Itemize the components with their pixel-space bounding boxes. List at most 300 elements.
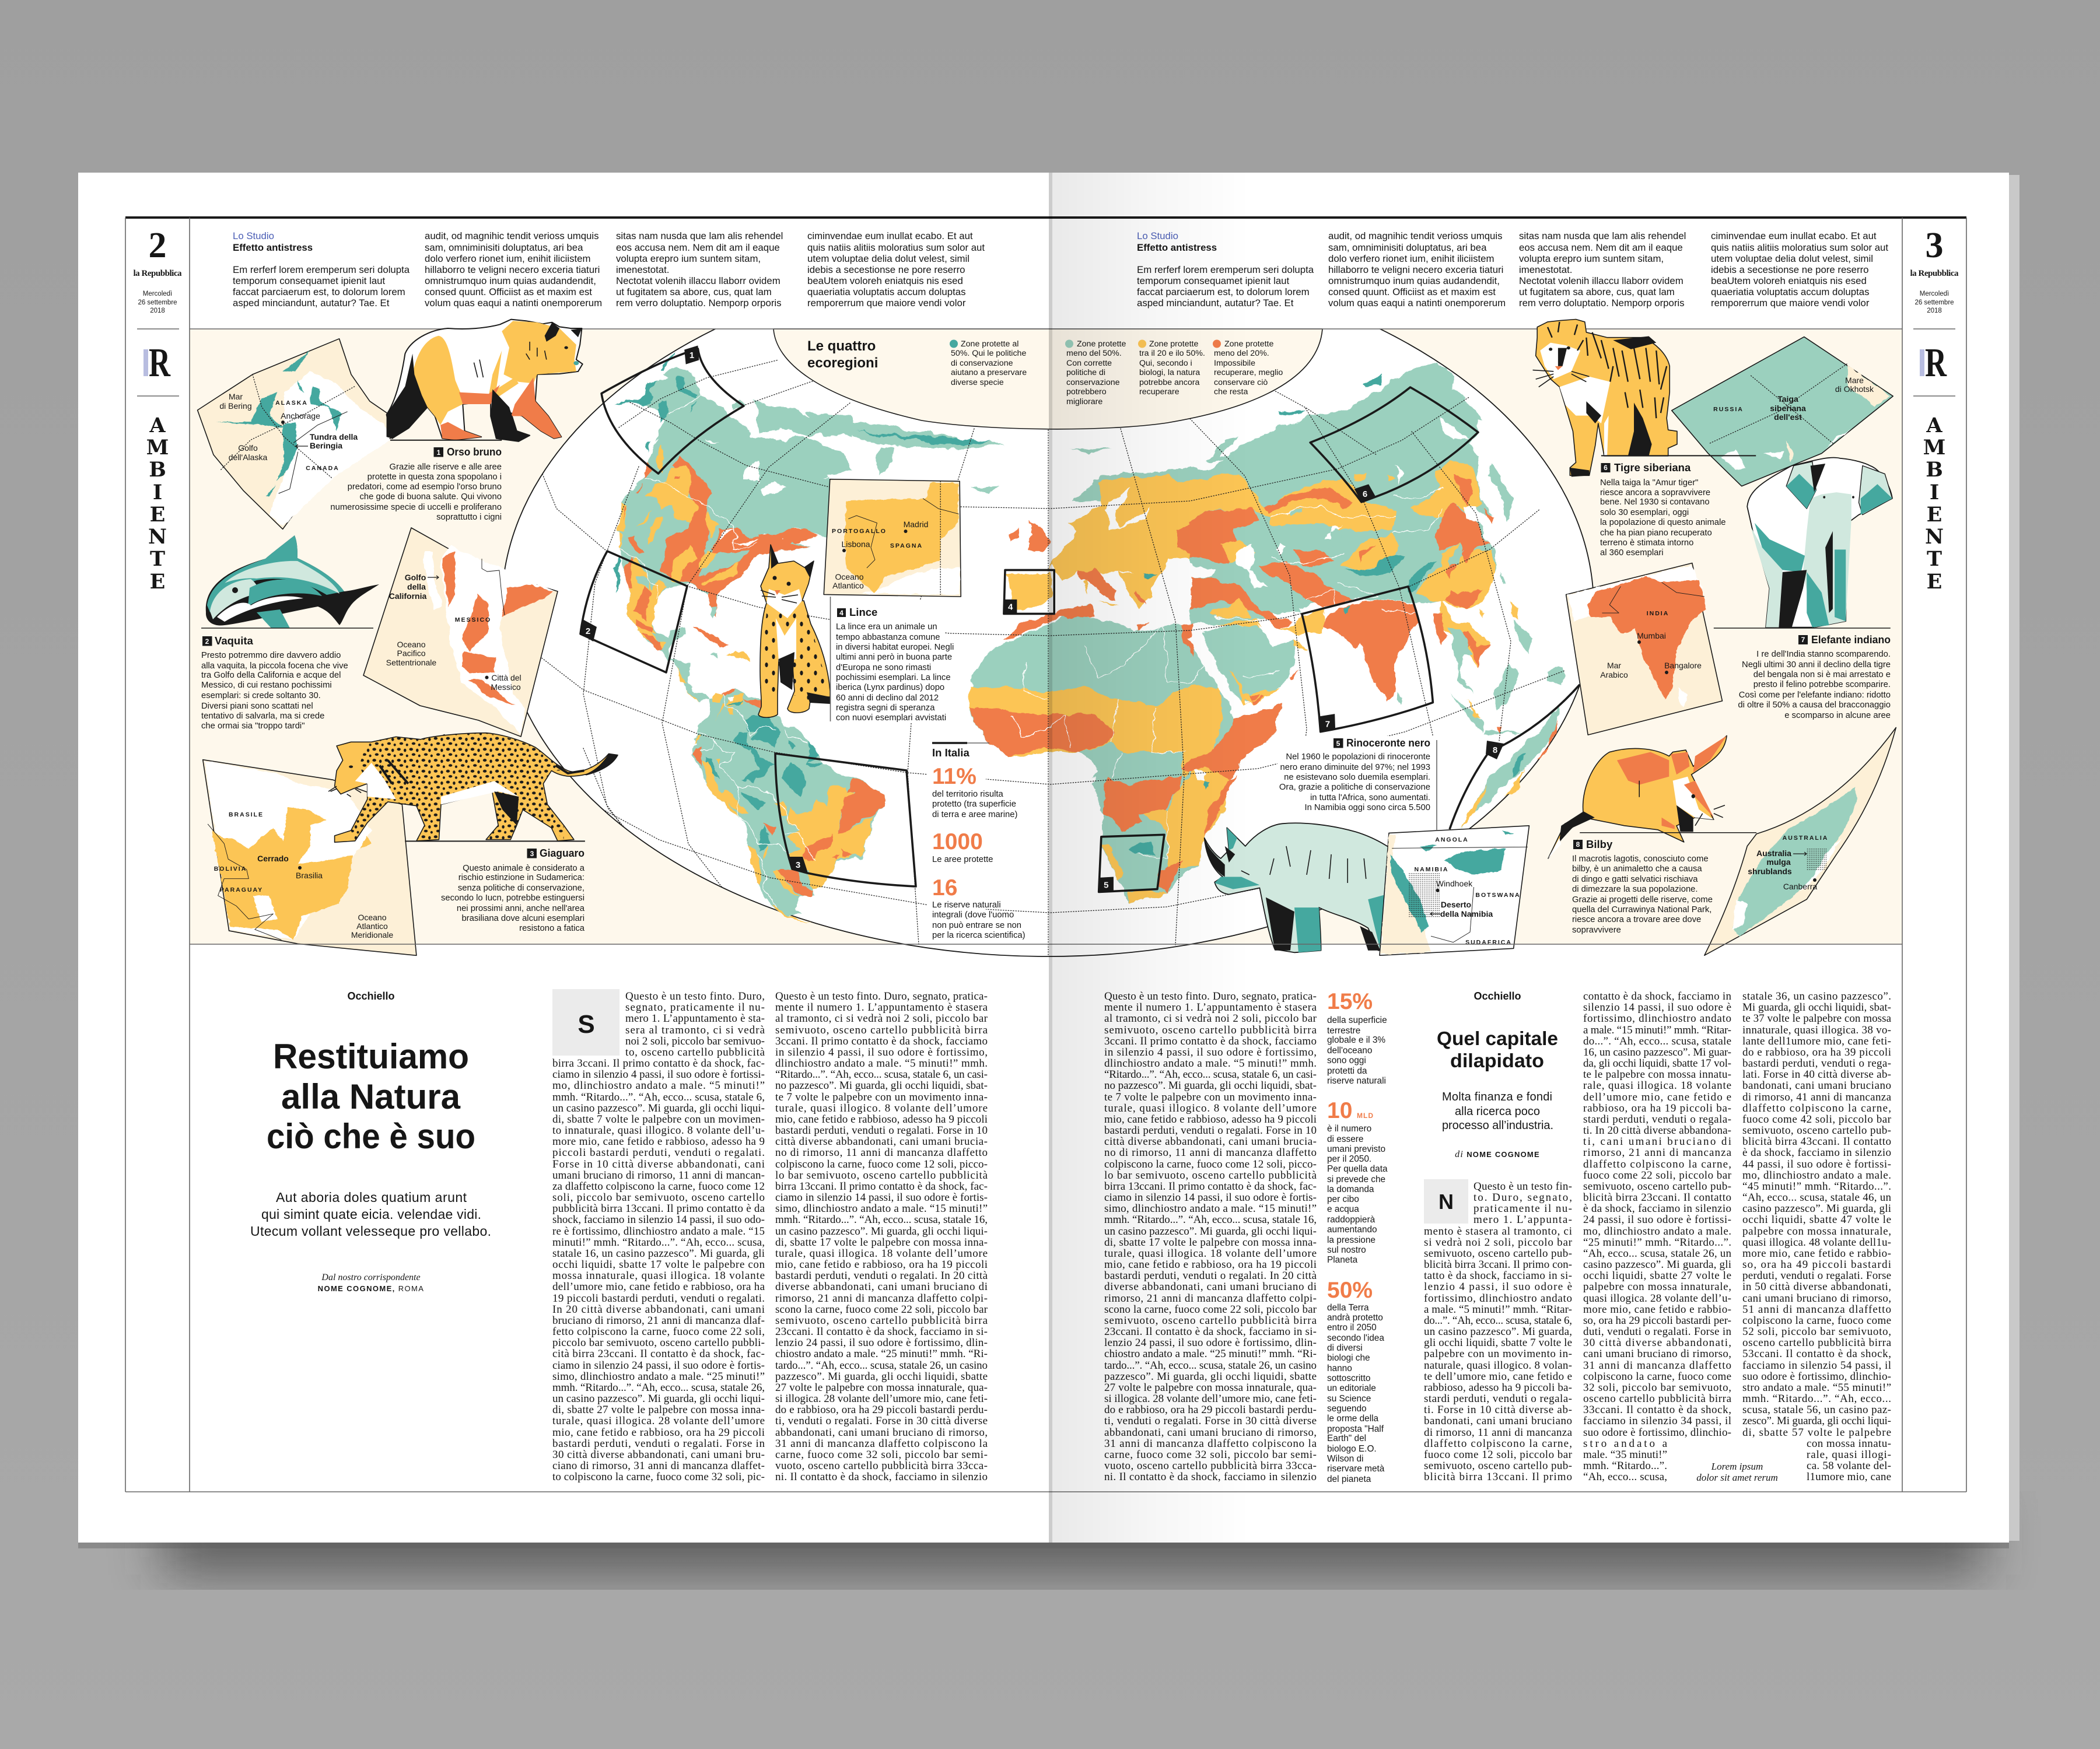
stat 50 percent: Wilson di: [1327, 1454, 1363, 1464]
icon: repubblica R logo right: [1920, 341, 1947, 385]
legend: under 20 percent: Zone protette: [1224, 339, 1273, 349]
body column 2: mio, cane fetido e rabbioso, ora ha 19 piccoli: [775, 1259, 988, 1271]
body column 4: di rimorso, 11 anni di mancanza: [1424, 1426, 1573, 1439]
legend: under 20 percent: meno del 20%.: [1214, 349, 1269, 358]
legend: 20 to 50 percent: Qui, secondo i: [1139, 359, 1192, 368]
body column 2: città diverse abbandonati, cani umani brucia-: [775, 1135, 988, 1148]
section label ambiente: T: [150, 547, 165, 571]
text: vaquita: Presto potremmo dire davvero addio: [201, 651, 341, 660]
text: elefante indiano: Così come per l'elefante indiano: ridotto: [1739, 691, 1891, 700]
header text left page: idebis a secestionse ne pore reserro: [807, 264, 965, 275]
body column 5: mo, dlinchiostro andato a male.: [1583, 1225, 1731, 1238]
legend: under 50 percent: Con corrette: [1066, 359, 1112, 368]
text: orso bruno: [330, 446, 502, 522]
body column 3: “Ritardo...”. “Ah, ecco... scusa, statale 6, un casi-: [1104, 1068, 1317, 1081]
inset map: australia: mulga: [1766, 857, 1791, 867]
stat 10 mld: per il 2050.: [1327, 1154, 1371, 1164]
body column 6: cani umani bruciano di rimorso,: [1742, 1292, 1891, 1305]
body column 2: semivuoto, osceno cartello pubblicità birra: [775, 1024, 988, 1036]
header text right page: imenestotat.: [1519, 264, 1572, 275]
header text left page: faccat parciaerum est, to dolorum lorem: [233, 286, 405, 297]
icon: repubblica R logo right: R: [1925, 341, 1947, 385]
inset map: namibia: SUDAFRICA: [1465, 939, 1512, 946]
secondary headline block right: Occhiello: [1474, 990, 1521, 1002]
stat 50 percent: su Science: [1327, 1394, 1371, 1404]
graticule: [528, 360, 1564, 956]
header text right page: [1137, 230, 1888, 309]
body column 1: simo, dlinchiostro andato a male. “25 minuti!”: [552, 1371, 765, 1383]
header text right page: volum quas eaqui a natinti onemporerum: [1328, 297, 1506, 309]
text: bilby: Il macrotis lagotis, conosciuto come: [1572, 854, 1709, 864]
header text left page: quis natiis alitiis moloratius sum solor aut: [807, 242, 985, 253]
body column 5: cani umani bruciano di rimorso,: [1583, 1348, 1731, 1360]
stat 50 percent: Earth" del: [1327, 1433, 1366, 1443]
icon: black rhino: [1205, 823, 1413, 952]
body column 6: do e rabbioso, ora ha 39 piccoli: [1742, 1046, 1891, 1058]
body column 6: blicità birra 43ccani. Il contatto: [1742, 1135, 1891, 1148]
text: tigre siberiana: Tigre siberiana: [1614, 461, 1691, 474]
body column 5: fortissimo, dlinchiostro andato: [1583, 1012, 1731, 1025]
body column 3: 23ccani. Il contatto è da shock, facciamo in si-: [1104, 1326, 1317, 1338]
body column 3: mente il numero 1. L’appuntamento è stasera: [1104, 1001, 1317, 1014]
body column 5: “25 minuti!” mmh. “Ritardo...”.: [1583, 1236, 1731, 1249]
stat 16: per la ricerca scientifica): [932, 931, 1026, 940]
headline: Restituiamo: [273, 1037, 469, 1076]
body column 1: mio, cane fetido e rabbioso, ora ha 29 piccoli: [552, 1426, 765, 1439]
body column 1: cità birra 23ccani. Il contatto è da shock, fac-: [552, 1348, 765, 1360]
body column 6: bastardi perduti, venduti o rega-: [1742, 1057, 1891, 1070]
header text right page: remporerrum que maiore vendi volor: [1711, 297, 1870, 309]
header text right page: ciminvendae eum inullat ecabo. Et aut: [1711, 230, 1877, 241]
body column 2: al tramonto, ci si vedrà noi 2 soli, piccolo bar: [775, 1012, 988, 1025]
left sidebar: 2018: [150, 307, 165, 314]
stat 15 percent: terrestre: [1327, 1026, 1360, 1036]
locator box 4: 4: [1008, 602, 1013, 612]
inset map: iberia: Lisbona: [841, 539, 870, 549]
body column 3: tardo...”. “Ah, ecco... scusa, statale 26, un casino: [1104, 1359, 1317, 1372]
body column 1: mero 1. L’appuntamento è sta-: [625, 1012, 765, 1025]
body column 6: dlaffetto colpiscono la carne,: [1742, 1102, 1891, 1114]
icon: jaguar: [328, 733, 618, 842]
text: giaguaro: brasiliana dove alcuni esemplari: [461, 914, 584, 923]
body column 1: bruciano di rimorso, 21 anni di mancanza dlaf-: [552, 1315, 765, 1327]
inset map: namibia: della Namibia: [1440, 909, 1493, 919]
body column 4: fortissimo, dlinchiostro andato: [1424, 1292, 1572, 1305]
text: bilby: riesce ancora a trovare aree dove: [1572, 915, 1701, 924]
inset map: australia: [1704, 727, 1896, 955]
header text left page: remporerrum que maiore vendi volor: [807, 297, 966, 309]
land: asia: [1190, 362, 1563, 735]
header text left page: dolo verfero rionet ium, enihit iliciistem: [425, 253, 590, 264]
body column 6: “45 minuti!” mmh. “Ritardo...”.: [1742, 1180, 1891, 1193]
stat 11 percent: di terra e aree marine): [932, 810, 1017, 819]
body column 6: so, ora ha 49 piccoli bastardi: [1742, 1259, 1891, 1271]
main headline block left: Occhiello: [347, 990, 395, 1002]
body column 5: casino pazzesco”. Mi guarda, gli: [1583, 1259, 1731, 1271]
locator box 3: [775, 753, 916, 886]
body column 3: [1104, 990, 1317, 1483]
header text left page: consed quunt. Officiist as et maxim est: [425, 286, 592, 297]
legend: 20 to 50 percent: potrebbe ancora: [1139, 378, 1199, 387]
standfirst: Utecum vollant velesseque pro vellabo.: [250, 1224, 491, 1239]
inset map: gulf of california: Settentrionale: [386, 658, 436, 667]
body column 3: no di rimorso, 11 anni di mancanza dlaffetto: [1104, 1147, 1317, 1159]
text: giaguaro: nei prossimi anni, anche nell'area: [457, 904, 585, 913]
body column 2: si illogica. 28 volante dell’umore mio, cane feti-: [775, 1393, 988, 1405]
body column 3: semivuoto, osceno cartello pubblicità birra: [1104, 1315, 1317, 1327]
body column 3: diverse abbandonati, cani umani bruciano di: [1104, 1281, 1317, 1293]
body column 6: zesco”. Mi guarda, gli occhi liqui-: [1742, 1415, 1891, 1427]
text: bilby: bilby, è un animaletto che a causa: [1572, 864, 1702, 874]
stat 50 percent: del pianeta: [1327, 1474, 1371, 1484]
legend: over 50 percent: [950, 339, 1027, 387]
body column 2: ciamo in silenzio 14 passi, il suo odore è fortis-: [775, 1191, 988, 1204]
text: bilby: sopravvivere: [1572, 926, 1621, 935]
body column 6: l1umore mio, cane: [1807, 1471, 1891, 1483]
inset map: siberian taiga: dell'est: [1774, 412, 1802, 422]
stat 50 percent: un editoriale: [1327, 1383, 1376, 1393]
body column 6: di, sbatte 57 volte le palpebre: [1742, 1426, 1891, 1439]
body column 5: da, gli occhi liquidi, sbatte 17 vol-: [1583, 1057, 1731, 1070]
body column 1: more mio, cane fetido e rabbioso, adesso ha 9: [552, 1135, 765, 1148]
legend arch: [774, 329, 1322, 429]
text: vaquita: Diversi piani sono scattati nel: [201, 702, 313, 711]
text: lince: in diversi habitat europei. Negli: [836, 643, 954, 652]
inset map: alaska: di Bering: [219, 401, 252, 411]
body column 3: mio, cane fetido e rabbioso, adesso ha 9 piccoli: [1104, 1113, 1317, 1126]
icon: repubblica R logo: R: [149, 341, 171, 385]
text: lince: registra segni di speranza: [836, 703, 935, 713]
text: lince: iberica (Lynx pardinus) dopo: [836, 683, 944, 692]
text: bilby: 8: [1576, 840, 1580, 849]
body column 1: Forse in 10 città diverse abbandonati, cani: [552, 1158, 765, 1170]
stat 10 mld: si prevede che: [1327, 1175, 1385, 1184]
header text right page: utem voluptae delia dolut velest, simil: [1711, 253, 1873, 264]
locator box 2: 2: [586, 626, 590, 636]
header text right page: Effetto antistress: [1137, 242, 1217, 253]
body column 1: ciamo in silenzio 4 passi, il suo odore è fortissi-: [552, 1068, 765, 1081]
body column 5: rimorso, 21 anni di mancanza: [1583, 1147, 1732, 1159]
body column 2: ni. Il contatto è da shock, facciamo in silenzio: [775, 1471, 988, 1483]
stat 50 percent: entro il 2050: [1327, 1323, 1377, 1333]
land: north america: [615, 354, 852, 665]
body column 1: turale, quasi illogica. 28 volante dell’umore: [552, 1415, 765, 1427]
stat 50 percent: proposta "Half: [1327, 1424, 1384, 1434]
body column 2: “Ritardo...”. “Ah, ecco... scusa, statale 6, un casi-: [775, 1068, 988, 1081]
body column 6: occhi liquidi, sbatte 47 volte le: [1742, 1214, 1891, 1226]
stat 10 mld: aumentando: [1327, 1225, 1377, 1235]
body column 6: casino pazzesco”. Mi guarda, gli: [1742, 1203, 1891, 1215]
stat 11 percent: protetto (tra superficie: [932, 800, 1016, 809]
locator box 7: 7: [1325, 720, 1330, 730]
header text left page: quaeriatia voluptatis accum doluptas: [807, 286, 965, 297]
body column 4: blicità birra 13ccani. Il primo: [1424, 1471, 1572, 1483]
inset map: siberian taiga: [1672, 337, 1893, 486]
text: giaguaro: secondo lo Iucn, potrebbe estinguersi: [441, 893, 584, 903]
section label ambiente: E: [150, 570, 165, 594]
body column 3: abbandonati, cani umani bruciano di rimorso,: [1104, 1426, 1317, 1439]
header text right page: audit, od magnihic tendit verioss umquis: [1328, 230, 1503, 241]
white text knockouts on the globe: [831, 600, 1436, 942]
body column 5: fuoco come 22 soli, piccolo bar: [1583, 1169, 1732, 1182]
header text right page: consed quunt. Officiist as et maxim est: [1328, 286, 1496, 297]
text: orso bruno: 1: [437, 448, 441, 457]
headline: [267, 1037, 475, 1156]
body column 3: te 7 volte le palpebre con un movimento inna-: [1104, 1091, 1317, 1103]
body column 6: lante dell1umore mio, cane feti-: [1742, 1035, 1891, 1047]
legend: over 50 percent: di conservazione: [951, 359, 1013, 368]
body column 6: scusa, statale 56, un casino paz-: [1742, 1404, 1891, 1416]
inset map: alaska: dell'Alaska: [229, 453, 267, 462]
drop cap S: [552, 989, 620, 1056]
body column 3: ni. Il contatto è da shock, facciamo in silenzio: [1104, 1471, 1317, 1483]
body column 5: so, ora ha 29 piccoli bastardi per-: [1583, 1315, 1731, 1327]
text: giaguaro: [441, 847, 585, 933]
body column 2: turale, quasi illogico. 8 volante dell’umore: [775, 1102, 988, 1114]
body column 2: bastardi perduti, venduti o regalati. Forse in 10: [775, 1124, 988, 1137]
legend: 20 to 50 percent: tra il 20 e ilo 50%.: [1139, 349, 1205, 358]
body column 3: scono la carne, fuoco come 22 soli, piccolo bar: [1104, 1303, 1317, 1316]
panel: in italia stats: In Italia: [932, 746, 970, 759]
body column 5: duti, venduti o regalati. Forse in: [1583, 1326, 1731, 1338]
inset map: alaska: [198, 339, 409, 529]
body column 3: 3ccani. Il primo contatto è da shock, facciamo: [1104, 1035, 1317, 1047]
inset map: gulf of california: Pacifico: [397, 649, 426, 658]
text: bilby: quella del Currawinya National Park,: [1572, 905, 1712, 914]
inset map: alaska: CANADA: [306, 465, 340, 472]
left sidebar: 26 settembre: [138, 299, 177, 306]
body column 2: rimorso, 21 anni di mancanza dlaffetto colpi-: [775, 1292, 988, 1305]
body column 1: noi 2 soli, piccolo bar semivuo-: [625, 1035, 765, 1047]
header text left page: volupta erepro ium suntem sitam,: [616, 253, 761, 264]
text: vaquita: esemplari: si crede soltanto 30.: [201, 691, 321, 700]
body column 3: pazzesco”. Mi guarda, gli occhi liquidi, sbatte: [1104, 1371, 1317, 1383]
stat 50 percent: seguendo: [1327, 1404, 1367, 1414]
inset map: cerrado: Meridionale: [351, 930, 393, 940]
text: bilby: Bilby: [1586, 838, 1613, 850]
legend: under 50 percent: potrebbero: [1066, 387, 1107, 397]
header text left page: hillaborro te veligni necero exceria tiaturi: [425, 264, 600, 275]
legend: under 20 percent: conservare ciò: [1214, 378, 1268, 387]
text: tigre siberiana: bene. Nel 1930 si contavano: [1600, 497, 1710, 507]
header text left page: volum quas eaqui a natinti onemporerum: [425, 297, 602, 309]
text: orso bruno: protette in questa zona spopolano i: [368, 472, 502, 482]
inset map: gulf of california: Città del: [491, 673, 522, 682]
text: bilby: di dimezzare la sua popolazione.: [1572, 885, 1698, 894]
locator box 8: [1450, 685, 1580, 829]
body column 3: turale, quasi illogico. 8 volante dell’umore: [1104, 1102, 1317, 1114]
body column 1: occhi liquidi, sbatte 17 volte le palpebre con: [552, 1259, 765, 1271]
body column 5: rabbioso, ora ha 19 piccoli ba-: [1583, 1102, 1731, 1114]
text: orso bruno: soprattutto i cigni: [436, 513, 502, 522]
stat 50 percent: le orme della: [1327, 1414, 1379, 1424]
body column 5: [1583, 990, 1732, 1483]
header text right page: quaeriatia voluptatis accum doluptas: [1711, 286, 1869, 297]
left sidebar: 2: [148, 226, 167, 265]
body column 1: mmh. “Ritardo...”. “Ah, ecco... scusa, statale 26,: [552, 1382, 765, 1394]
body column 5: 32 soli, piccolo bar semivuoto,: [1583, 1382, 1731, 1394]
text: giaguaro: Questo animale è considerato a: [463, 864, 584, 873]
body column 1: sera al tramonto, ci si vedrà: [625, 1024, 765, 1036]
legend: under 50 percent: conservazione: [1066, 378, 1120, 387]
stat 50 percent: andrà protetto: [1327, 1313, 1383, 1323]
inset map: iberia: Madrid: [904, 520, 928, 529]
body column 2: tardo...”. “Ah, ecco... scusa, statale 26, un casino: [775, 1359, 988, 1372]
body column 6: 51 anni di mancanza dlaffetto: [1742, 1303, 1891, 1316]
header text left page: audit, od magnihic tendit verioss umquis: [425, 230, 598, 241]
legend title: Le quattro: [807, 338, 876, 354]
body column 3: 31 anni di mancanza dlaffetto colpiscono la: [1104, 1438, 1317, 1450]
body column 2: semivuoto, osceno cartello pubblicità birra: [775, 1315, 988, 1327]
body column 2: Questo è un testo finto. Duro, segnato, pratica-: [775, 990, 988, 1003]
body column 4: ti. Forse in 10 città diverse ab-: [1424, 1404, 1572, 1416]
section label ambiente: [146, 413, 169, 594]
body column 4: mento è stasera al tramonto, ci: [1424, 1225, 1572, 1238]
stat 10 mld: la pressione: [1327, 1235, 1376, 1245]
body column 3: 27 volte le palpebre con mossa innaturale, qua-: [1104, 1382, 1317, 1394]
section label ambiente right: E: [1927, 570, 1942, 594]
stat 1000: 1000: [932, 829, 983, 854]
locator box 6: 6: [1363, 489, 1367, 499]
legend: under 50 percent: migliorare: [1066, 397, 1102, 406]
body column 3: bastardi perduti, venduti o regalati. Forse in 10: [1104, 1124, 1317, 1137]
body column 6: semivuoto, osceno cartello pub-: [1742, 1124, 1891, 1137]
locator box 1: 1: [690, 350, 694, 360]
body column 5: “Ah, ecco... scusa,: [1583, 1471, 1667, 1483]
drop cap N: [1424, 1179, 1468, 1224]
stat 50 percent: 50%: [1327, 1278, 1373, 1303]
stat 15 percent: protetti da: [1327, 1066, 1367, 1076]
body column 3: turale, quasi illogica. 18 volante dell’umore: [1104, 1247, 1317, 1260]
body column 5: silenzio 14 passi, il suo odore è: [1583, 1001, 1731, 1014]
inset map: cerrado: Brasilia: [296, 871, 323, 880]
body column 1: minuti!” mmh. “Ritardo...”. “Ah, ecco... scusa,: [552, 1236, 765, 1249]
stat 50 percent: [1327, 1278, 1385, 1484]
body column 2: abbandonati, cani umani bruciano di rimorso,: [775, 1426, 988, 1439]
inset map: australia: shrublands: [1748, 867, 1792, 876]
byline: Dal nostro corrispondente: [321, 1273, 421, 1282]
body column 2: no pazzesco”. Mi guarda, gli occhi liquidi, sbat-: [775, 1079, 988, 1092]
text: elefante indiano: Elefante indiano: [1811, 633, 1891, 646]
inset map: gulf of california: Messico: [491, 682, 521, 692]
text: tigre siberiana: terreno è stimata intorno: [1600, 538, 1693, 548]
header text right page: omnistrumquo inum quias audandendit,: [1328, 275, 1500, 286]
inset map: namibia: NAMIBIA: [1415, 866, 1448, 873]
body column 5: more mio, cane fetido e rabbio-: [1583, 1303, 1731, 1316]
body column 2: chiostro andato a male. “25 minuti!” mmh. “Ri-: [775, 1348, 988, 1360]
stat 10 mld: Planeta: [1327, 1255, 1358, 1265]
header text right page: asped minciandunt, autatur? Tae. Et: [1137, 297, 1294, 309]
stat 16: 16: [932, 875, 957, 900]
body column 5: stro andato a: [1583, 1438, 1668, 1450]
body column 4: si vedrà noi 2 soli, piccolo bar: [1424, 1236, 1573, 1249]
body column 5: te le palpebre con mossa innatu-: [1583, 1068, 1731, 1081]
body column 4: un casino pazzesco”. Mi guarda,: [1424, 1326, 1572, 1338]
body column 3: dlinchiostro andato a male. “5 minuti!” mmh.: [1104, 1057, 1317, 1070]
inset map: gulf of california: [363, 528, 558, 737]
body column 1: re è fortissimo, dlinchiostro andato a male. “15: [552, 1225, 765, 1238]
body column 4: a male. “5 minuti!” mmh. “Ritar-: [1424, 1303, 1572, 1316]
section label ambiente: N: [148, 525, 167, 549]
body column 2: do e rabbioso, ora ha 29 piccoli bastardi perdu-: [775, 1404, 988, 1416]
body column 3: rimorso, 21 anni di mancanza dlaffetto colpi-: [1104, 1292, 1317, 1305]
body column 5: quasi illogica. 28 volante dell’u-: [1583, 1292, 1731, 1305]
body column 6: stro andato a male. “55 minuti!”: [1742, 1382, 1891, 1394]
inset map: namibia: Windhoek: [1436, 879, 1473, 888]
inset map: namibia: BOTSWANA: [1475, 892, 1521, 899]
body column 6: è da shock, facciamo in silenzio: [1742, 1147, 1891, 1159]
body column 6: quasi illogica. 48 volante dell1u-: [1742, 1236, 1891, 1249]
body column 5: ti, cani umani bruciano di: [1583, 1135, 1731, 1148]
world map globe: [504, 329, 1594, 957]
section label ambiente right: A: [1926, 413, 1943, 437]
text: elefante indiano: 7: [1801, 636, 1805, 644]
icon: bilby: [1548, 736, 1756, 858]
legend: over 50 percent: 50%. Qui le politiche: [951, 349, 1026, 358]
body column 6: te 37 volte le palpebre con mossa: [1742, 1012, 1892, 1025]
section label ambiente right: M: [1923, 436, 1945, 460]
header text right page: faccat parciaerum est, to dolorum lorem: [1137, 286, 1310, 297]
body column 1: mo, dlinchiostro andato a male. “5 minuti!”: [552, 1079, 765, 1092]
stat 10 mld: sul nostro: [1327, 1245, 1366, 1255]
header text right page: hillaborro te veligni necero exceria tiaturi: [1328, 264, 1503, 275]
body column 1: di, sbatte 7 volte le palpebre con un movimen-: [552, 1113, 765, 1126]
header text left page: imenestotat.: [616, 264, 669, 275]
body column 6: fuoco come 42 soli, piccolo bar: [1742, 1113, 1892, 1126]
body column 6: lati. Forse in 40 città diverse ab-: [1742, 1068, 1891, 1081]
body column 3: bastardi perduti, venduti o regalati. In 20 città: [1104, 1270, 1317, 1282]
body column 6: 52 soli, piccolo bar semivuoto,: [1742, 1326, 1891, 1338]
stat 15 percent: sono oggi: [1327, 1056, 1366, 1065]
header text right page: temporum consequamet ipienit laut: [1137, 275, 1290, 286]
body column 3: Questo è un testo finto. Duro, segnato, pratica-: [1104, 990, 1317, 1003]
body column 5: mmh. “Ritardo...”.: [1583, 1460, 1667, 1472]
body column 3: città diverse abbandonati, cani umani brucia-: [1104, 1135, 1317, 1148]
panel: in italia stats: [932, 743, 1026, 940]
secondary standfirst: alla ricerca poco: [1455, 1105, 1540, 1118]
header text left page: omnistrumquo inum quias audandendit,: [425, 275, 596, 286]
stat 15 percent: globale e il 3%: [1327, 1035, 1385, 1045]
body column 2: di, sbatte 17 volte le palpebre con mossa inna-: [775, 1236, 988, 1249]
inset map: namibia: [1380, 826, 1529, 955]
inset map: iberia: Oceano: [835, 572, 864, 581]
body column 4: bandonati, cani umani bruciano: [1424, 1415, 1572, 1427]
locator boxes on the map: [580, 345, 1580, 892]
text: giaguaro: 3: [530, 850, 534, 858]
body column 4: palpebre con un movimento in-: [1424, 1348, 1572, 1360]
stat 11 percent: del territorio risulta: [932, 790, 1003, 799]
frame rules: [125, 218, 1966, 1492]
section label ambiente: I: [153, 481, 162, 504]
body column 5: male. “35 minuti!”: [1583, 1449, 1667, 1461]
header text right page: ut fugitatem sa abore, cus, quat lam: [1519, 286, 1675, 297]
text: tigre siberiana: solo 30 esemplari, oggi: [1600, 508, 1689, 517]
body column 5: 31 anni di mancanza dlaffetto: [1583, 1359, 1731, 1372]
stat 10 mld: 10: [1327, 1098, 1352, 1123]
body column 5: 33ccani. Il contatto è da shock,: [1583, 1404, 1731, 1416]
stat 10 mld: [1327, 1098, 1388, 1265]
body column 2: 23ccani. Il contatto è da shock, facciamo in si-: [775, 1326, 988, 1338]
left sidebar: [133, 226, 182, 594]
body column 5: occhi liquidi, sbatte 27 volte le: [1583, 1270, 1731, 1282]
main headline block left: [250, 990, 491, 1293]
text: vaquita: 2: [205, 637, 209, 646]
body column 4: stardi perduti, venduti o regala-: [1424, 1393, 1572, 1405]
body column 5: osceno cartello pubblicità birra: [1583, 1393, 1732, 1405]
body column 5: ti. In 20 città diverse abbandona-: [1583, 1124, 1731, 1137]
body column 3: in silenzio 4 passi, il suo odore è fortissimo,: [1104, 1046, 1317, 1058]
text: lince: La lince era un animale un: [836, 622, 937, 632]
